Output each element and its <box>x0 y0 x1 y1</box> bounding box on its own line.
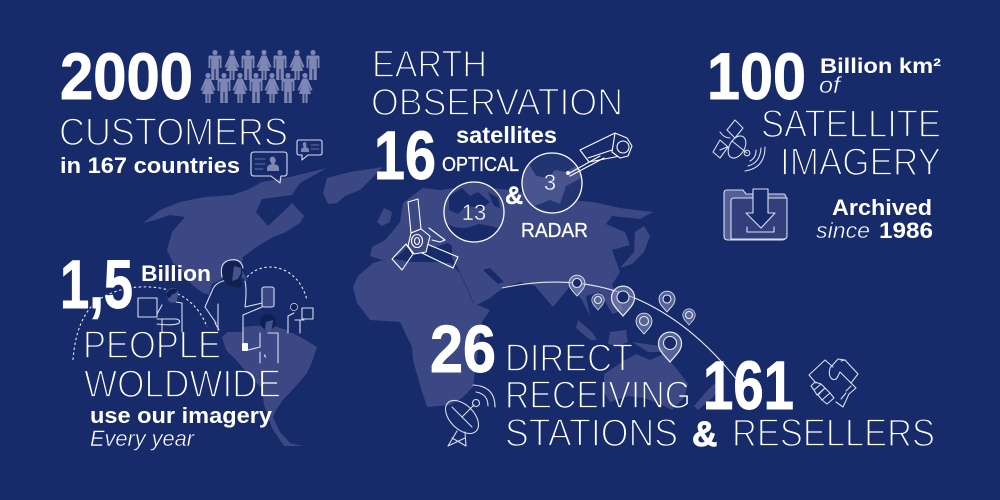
text: of: of <box>819 72 843 98</box>
icon: handshake <box>809 359 858 407</box>
heading: direct receiving stations: RECEIVING <box>505 374 691 417</box>
circle: 13 optical satellites: 13 <box>462 200 486 225</box>
number 2000: 2000 <box>60 39 193 113</box>
panel: customers <box>59 39 322 183</box>
heading: people worldwide: WOLDWIDE <box>84 363 281 406</box>
text: billion: Billion <box>141 261 211 286</box>
circle: 3 radar satellites: 3 <box>544 170 556 195</box>
icon: customer figures <box>200 50 320 103</box>
figure: child with phone <box>242 314 278 363</box>
text: since 1986 <box>816 218 933 243</box>
text: use our imagery: use our imagery <box>90 403 273 428</box>
figure: woman with tablet <box>205 260 274 347</box>
text: since 1986: 1986 <box>879 218 933 243</box>
world map <box>143 167 724 446</box>
text: since 1986: since <box>816 218 870 243</box>
text: archived: Archived <box>832 195 932 220</box>
icon: archive folder <box>724 189 787 240</box>
heading: earth observation <box>371 44 623 124</box>
heading: customers: CUSTOMERS <box>59 111 288 154</box>
icon: small chat bubble <box>297 140 322 160</box>
text: radar: RADAR <box>521 220 588 242</box>
map: australia <box>604 354 688 410</box>
illustration: people using imagery <box>73 260 313 363</box>
icon: satellite dish signal <box>713 120 765 171</box>
map: japan and islands <box>576 226 724 410</box>
panel: satellite imagery <box>707 39 941 243</box>
heading: direct receiving stations: STATIONS <box>505 412 678 455</box>
heading: satellite imagery <box>761 103 941 184</box>
text: ampersand: & <box>505 182 523 210</box>
map: europe <box>370 186 476 260</box>
text: ampersand: & <box>692 415 717 454</box>
heading: people worldwide <box>83 324 281 406</box>
dashed connection arcs <box>73 267 307 360</box>
figure: man with laptop <box>138 288 182 332</box>
text: optical: OPTICAL <box>442 154 519 176</box>
number 16: 16 <box>374 117 436 194</box>
heading: direct receiving stations <box>505 337 691 455</box>
heading: direct receiving stations: DIRECT <box>505 337 633 380</box>
number 26: 26 <box>430 312 496 387</box>
circle: 3 radar satellites <box>522 153 582 213</box>
icons: location pins <box>569 275 695 362</box>
heading: earth observation: OBSERVATION <box>371 82 623 124</box>
icon: radar satellite <box>567 133 632 176</box>
heading: people worldwide: PEOPLE <box>83 324 221 367</box>
map: asia <box>430 186 653 316</box>
heading: earth observation: EARTH <box>372 44 487 86</box>
arc: coverage path <box>502 282 737 380</box>
icon: large chat bubble <box>251 152 287 183</box>
map: north america <box>143 168 327 304</box>
map: british isles <box>377 208 392 226</box>
number 100: 100 <box>707 39 806 113</box>
map: greenland <box>323 167 383 204</box>
circle: 13 optical satellites <box>444 182 504 242</box>
map: inland seas <box>483 268 504 284</box>
text: billion km2: Billion km² <box>820 55 941 78</box>
panel: receiving stations and resellers <box>430 275 935 455</box>
text: in 167 countries: in 167 countries <box>60 153 240 178</box>
heading: resellers: RESELLERS <box>732 412 935 455</box>
heading: satellite imagery: IMAGERY <box>780 141 941 184</box>
panel: earth observation <box>371 44 632 270</box>
map: south america <box>222 325 317 446</box>
icon: receiving dish <box>439 385 495 446</box>
text: satellites: satellites <box>456 122 557 148</box>
icon: optical satellite <box>392 199 458 270</box>
figure: man with tablet <box>288 303 313 333</box>
panel: people worldwide <box>60 246 313 451</box>
text: every year: Every year <box>90 426 196 451</box>
number 161: 161 <box>703 347 794 424</box>
number 1,5: 1,5 <box>60 246 133 323</box>
map: africa <box>353 258 490 407</box>
heading: satellite imagery: SATELLITE <box>761 103 941 146</box>
